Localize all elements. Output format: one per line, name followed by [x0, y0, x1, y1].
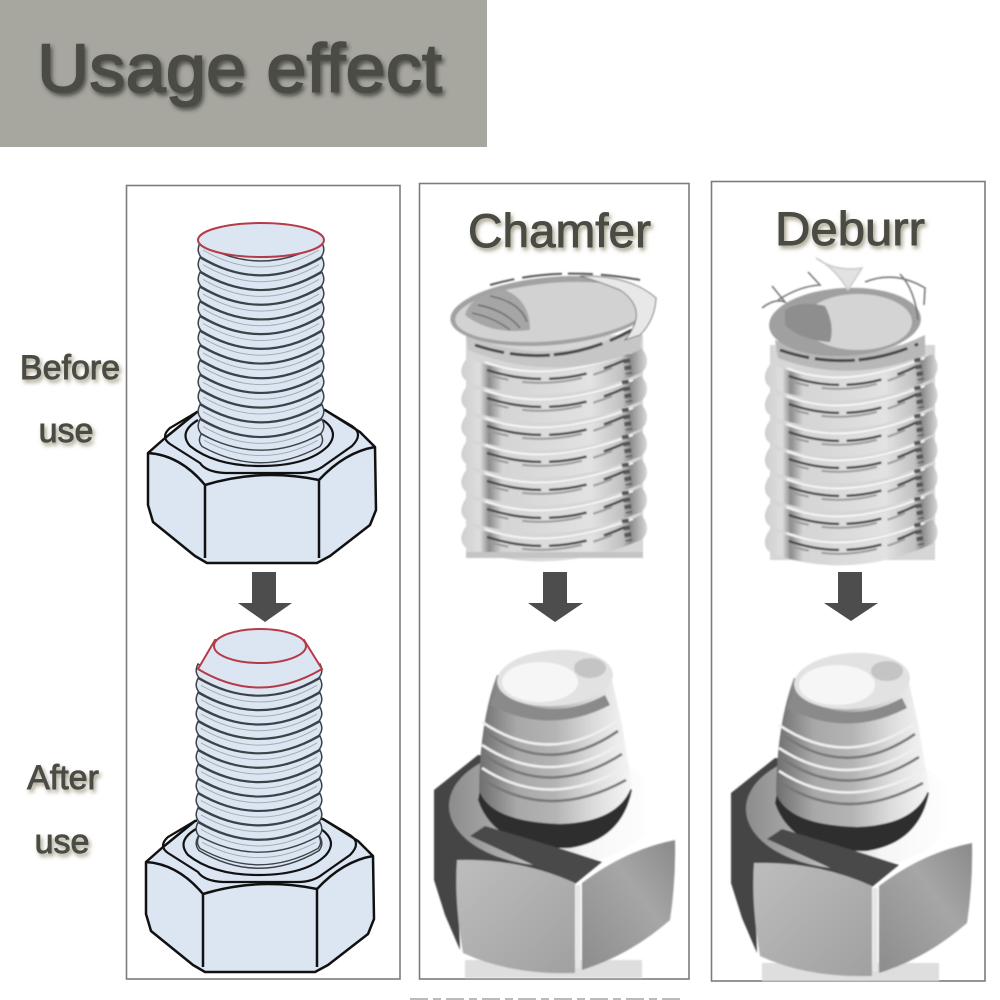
- heading: Deburr: Deburr: [775, 202, 925, 255]
- icon: bolt after use: [146, 629, 374, 972]
- icon: bolt before use: [148, 223, 376, 563]
- panel: chamfer: [420, 184, 689, 979]
- panel: diagram: [126, 186, 400, 979]
- title text: Usage effect: [37, 30, 442, 107]
- label: before use: [20, 349, 120, 450]
- label: before use: use: [39, 412, 93, 450]
- photo: chamfered bolt after: [434, 646, 675, 978]
- photo: chamfer thread before: [447, 268, 657, 561]
- label: after use: use: [35, 823, 89, 861]
- arrow: [238, 572, 292, 622]
- label: after use: After: [27, 759, 99, 797]
- icon: metal burrs: [762, 258, 925, 320]
- title banner: [0, 0, 487, 147]
- arrow: [824, 572, 878, 621]
- panel: deburr: [712, 182, 985, 981]
- bottom edge marks: [410, 998, 680, 1000]
- photo: deburred bolt after: [731, 649, 972, 981]
- label: before use: Before: [20, 349, 120, 387]
- photo: burred thread before: [765, 284, 938, 565]
- label: after use: [27, 759, 99, 861]
- heading: Chamfer: Chamfer: [468, 204, 651, 257]
- arrow: [528, 572, 583, 622]
